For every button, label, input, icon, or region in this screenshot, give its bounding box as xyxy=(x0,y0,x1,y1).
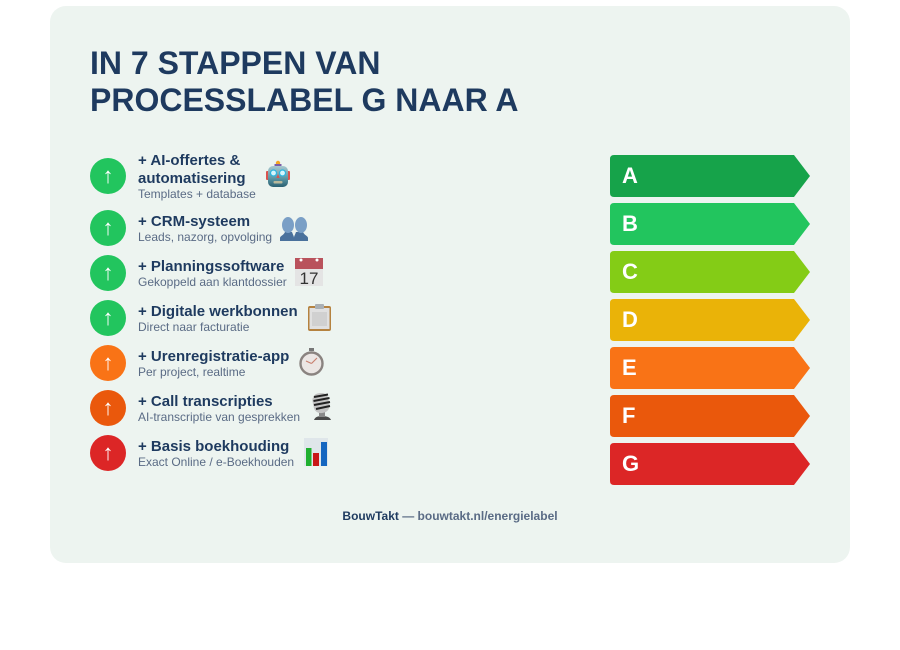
step detail: Exact Online / e-Boekhouden xyxy=(138,455,294,469)
arrow badge orange xyxy=(90,345,126,381)
label bar C: C xyxy=(622,259,638,284)
label bar G: G xyxy=(622,451,639,476)
arrow badge green: ↑ xyxy=(102,215,114,240)
step detail: Per project, realtime xyxy=(138,365,245,379)
icon: clipboard xyxy=(308,304,331,331)
step 1: AI-offertes xyxy=(90,152,290,201)
step name: + Call transcripties xyxy=(138,393,273,410)
step name: + Basis boekhouding xyxy=(138,438,289,455)
step 4: Digitale werkbonnen xyxy=(90,300,331,336)
step name xyxy=(138,152,246,187)
label bar B xyxy=(610,203,810,245)
icon: calendar xyxy=(295,258,323,286)
arrow badge red: ↑ xyxy=(102,440,114,465)
arrow badge red xyxy=(90,435,126,471)
step name: + Urenregistratie-app xyxy=(138,348,289,365)
label bar G xyxy=(610,443,810,485)
arrow badge green xyxy=(90,158,126,194)
label bar A: A xyxy=(622,163,638,188)
step name: + CRM-systeem xyxy=(138,213,250,230)
step detail: AI-transcriptie van gesprekken xyxy=(138,410,300,424)
step name: + Planningssoftware xyxy=(138,258,284,275)
icon: microphone xyxy=(312,393,331,420)
step name: automatisering xyxy=(138,170,246,187)
icon: robot xyxy=(266,160,290,187)
arrow badge green xyxy=(90,210,126,246)
arrow badge green: ↑ xyxy=(102,305,114,330)
arrow badge green xyxy=(90,300,126,336)
step 6: Call transcripties xyxy=(90,390,331,426)
step name: + AI-offertes & xyxy=(138,152,240,169)
label bar E xyxy=(610,347,810,389)
step 7: Basis boekhouding xyxy=(90,435,328,471)
label bar E: E xyxy=(622,355,637,380)
arrow badge orange: ↑ xyxy=(102,350,114,375)
icon: bar chart xyxy=(304,438,328,466)
step detail: Leads, nazorg, opvolging xyxy=(138,230,272,244)
arrow badge green: ↑ xyxy=(102,163,114,188)
label bar F xyxy=(610,395,810,437)
label bar D: D xyxy=(622,307,638,332)
label bar B: B xyxy=(622,211,638,236)
footer: BouwTakt — bouwtakt.nl/energielabel xyxy=(342,509,558,523)
label bar D xyxy=(610,299,810,341)
icon: people xyxy=(280,217,308,241)
title xyxy=(90,45,518,118)
label bar C xyxy=(610,251,810,293)
step name: + Digitale werkbonnen xyxy=(138,303,298,320)
step detail: Templates + database xyxy=(138,187,256,201)
arrow badge dark orange: ↑ xyxy=(102,395,114,420)
step detail: Direct naar facturatie xyxy=(138,320,249,334)
step detail: Gekoppeld aan klantdossier xyxy=(138,275,287,289)
arrow badge green xyxy=(90,255,126,291)
label bar F: F xyxy=(622,403,635,428)
arrow badge green: ↑ xyxy=(102,260,114,285)
icon: stopwatch xyxy=(299,348,324,376)
step 5: Urenregistratie-app xyxy=(90,345,324,381)
step 3: Planningssoftware xyxy=(90,255,323,291)
card panel xyxy=(50,6,850,563)
step 2: CRM-systeem xyxy=(90,210,308,246)
label bar A xyxy=(610,155,810,197)
title: IN 7 STAPPEN VAN xyxy=(90,45,380,81)
title: PROCESSLABEL G NAAR A xyxy=(90,82,518,118)
arrow badge dark orange xyxy=(90,390,126,426)
